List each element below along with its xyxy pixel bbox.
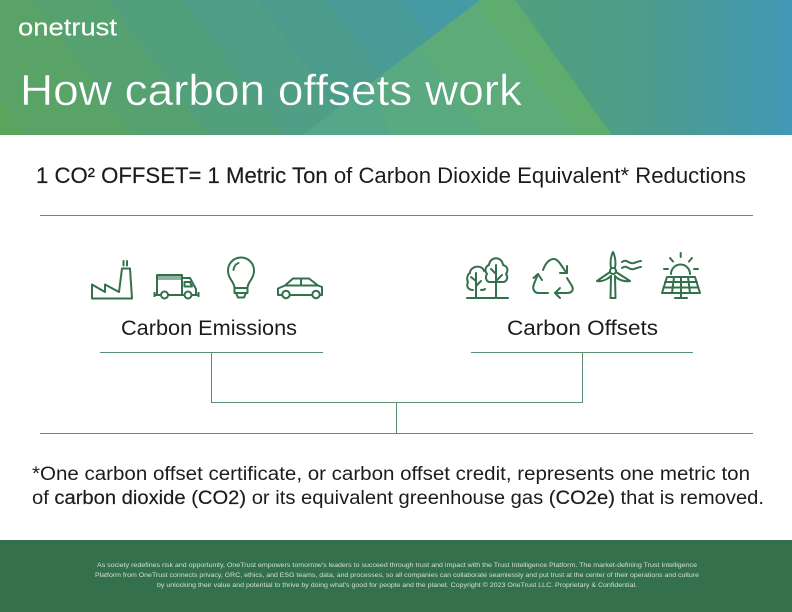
- footnote: [32, 464, 764, 509]
- header banner: [0, 0, 792, 135]
- icon: factory: [92, 261, 132, 298]
- footnote: of carbon dioxide (CO2) or its equivalent greenhouse gas (CO2e) that is removed.: [32, 488, 764, 509]
- logo: onetrust: onetrust: [18, 14, 117, 42]
- icon: solar panel: [662, 253, 700, 298]
- icon: light bulb: [228, 258, 254, 298]
- footer text: Platform from OneTrust connects privacy, GRC, ethics, and ESG teams, data, and processes, so all companies can collaborate seamlessly and put trust at the center of their operations and culture: [95, 572, 699, 579]
- equation headline: 1 CO² OFFSET= 1 Metric Ton of Carbon Dioxide Equivalent* Reductions: [36, 163, 746, 188]
- title: How carbon offsets work: [20, 66, 523, 115]
- carbon emissions group: [92, 258, 322, 340]
- label: Carbon Offsets: Carbon Offsets: [507, 317, 658, 340]
- label: Carbon Emissions: Carbon Emissions: [121, 317, 297, 340]
- footer text: [95, 562, 699, 589]
- footer text: by unlocking their value and potential to thrive by doing what's good for people and the planet. Copyright © 2023 OneTrust LLC. Proprietary & Confidential.: [157, 581, 637, 589]
- footer band: [0, 540, 792, 612]
- icon: car: [278, 278, 322, 298]
- icon: wind turbine: [597, 252, 641, 298]
- icon: delivery truck: [154, 275, 199, 298]
- top divider: [40, 215, 753, 216]
- icon: recycling arrows: [533, 259, 573, 298]
- footer text: As society redefines risk and opportunity, OneTrust empowers tomorrow's leaders to succeed through trust and impact with the Trust Intelligence Platform. The market-defining Trust Intelligence: [97, 562, 697, 569]
- footnote: *One carbon offset certificate, or carbon offset credit, represents one metric ton: [32, 464, 750, 485]
- icon: trees: [467, 258, 508, 298]
- carbon offsets group: [467, 252, 700, 340]
- connector bracket: [40, 352, 753, 434]
